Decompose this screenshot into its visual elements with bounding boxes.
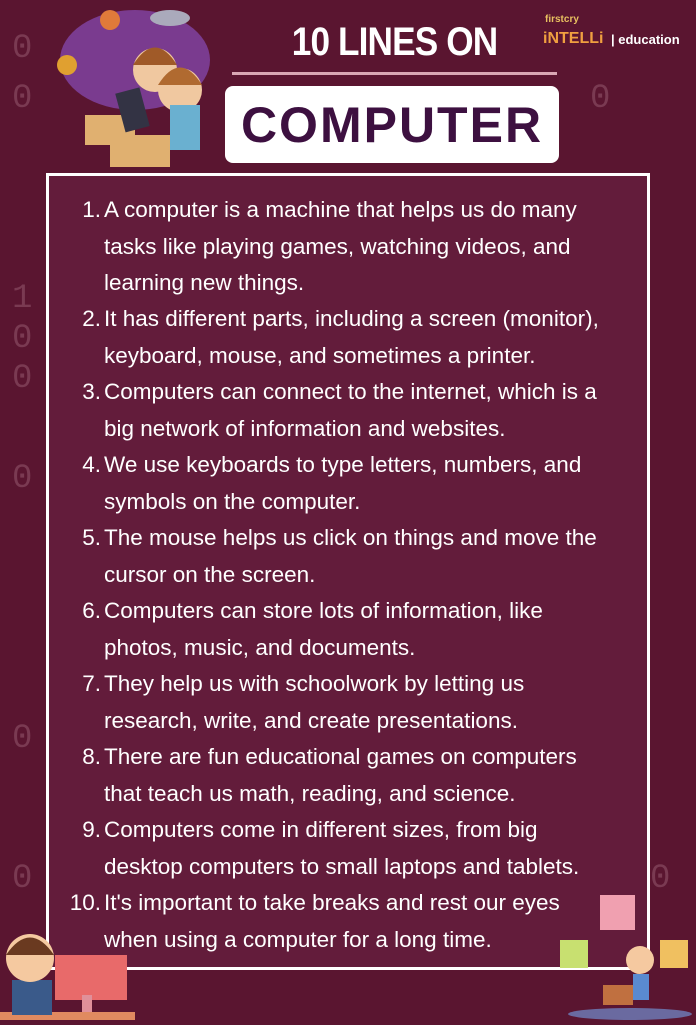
panel: ten lines: photos, music, and documents. <box>104 634 415 660</box>
panel: ten lines: cursor on the screen. <box>104 562 315 586</box>
logo <box>543 14 680 47</box>
panel: ten lines: learning new things. <box>104 270 304 295</box>
illustration: girl with screens <box>560 895 692 1020</box>
panel: ten lines: 5. <box>82 525 101 550</box>
text: 0 <box>12 720 32 758</box>
panel: ten lines: that teach us math, reading, and science. <box>104 780 516 806</box>
panel: ten lines: 2. <box>82 306 101 331</box>
panel: ten lines: A computer is a machine that helps us do many <box>104 197 577 222</box>
panel: ten lines: 8. <box>82 744 101 769</box>
panel: ten lines: 4. <box>82 452 101 477</box>
heading box: COMPUTER <box>241 97 543 153</box>
text: 0 <box>12 30 32 68</box>
illustration: kids at laptops <box>57 10 210 167</box>
panel: ten lines: Computers can connect to the internet, which is a <box>104 379 597 404</box>
illustration: boy at computer <box>0 934 135 1020</box>
panel: ten lines: Computers can store lots of information, like <box>104 598 543 623</box>
text: 1 <box>12 280 32 318</box>
panel: ten lines: 10. <box>70 890 101 915</box>
panel: ten lines: 6. <box>82 598 101 623</box>
text: 0 <box>12 860 32 898</box>
text: 0 <box>650 860 670 898</box>
panel: ten lines: There are fun educational games on computers <box>104 744 577 769</box>
panel: ten lines: symbols on the computer. <box>104 488 360 514</box>
panel: ten lines: 1. <box>82 197 101 222</box>
panel: ten lines: big network of information and websites. <box>104 416 505 440</box>
panel: ten lines: It has different parts, including a screen (monitor), <box>104 306 599 331</box>
panel: ten lines: 9. <box>82 817 101 842</box>
panel: ten lines: when using a computer for a long time. <box>104 926 492 952</box>
panel: ten lines: We use keyboards to type letters, numbers, and <box>104 452 581 477</box>
panel: ten lines: desktop computers to small laptops and tablets. <box>104 854 579 878</box>
heading box <box>225 86 559 163</box>
text: 0 <box>12 80 32 118</box>
panel: ten lines: research, write, and create presentations. <box>104 708 518 732</box>
logo: | education <box>611 32 680 47</box>
panel: ten lines <box>46 173 650 970</box>
panel: ten lines: 3. <box>82 379 101 404</box>
panel: ten lines: The mouse helps us click on things and move the <box>104 525 597 550</box>
panel: ten lines: keyboard, mouse, and sometimes a printer. <box>104 342 535 368</box>
panel: ten lines: 7. <box>82 671 101 696</box>
text: 0 <box>12 460 32 498</box>
panel: ten lines: It's important to take breaks and rest our eyes <box>104 890 560 915</box>
panel: ten lines: Computers come in different sizes, from big <box>104 817 538 842</box>
logo: iNTELLi <box>543 30 603 47</box>
text: 0 <box>12 360 32 398</box>
panel: ten lines: They help us with schoolwork by letting us <box>104 671 524 696</box>
title: 10 LINES ON <box>292 20 497 64</box>
panel: ten lines: tasks like playing games, watching videos, and <box>104 234 571 258</box>
logo: firstcry <box>545 14 579 25</box>
text: 0 <box>590 80 610 118</box>
text: 0 <box>12 320 32 358</box>
